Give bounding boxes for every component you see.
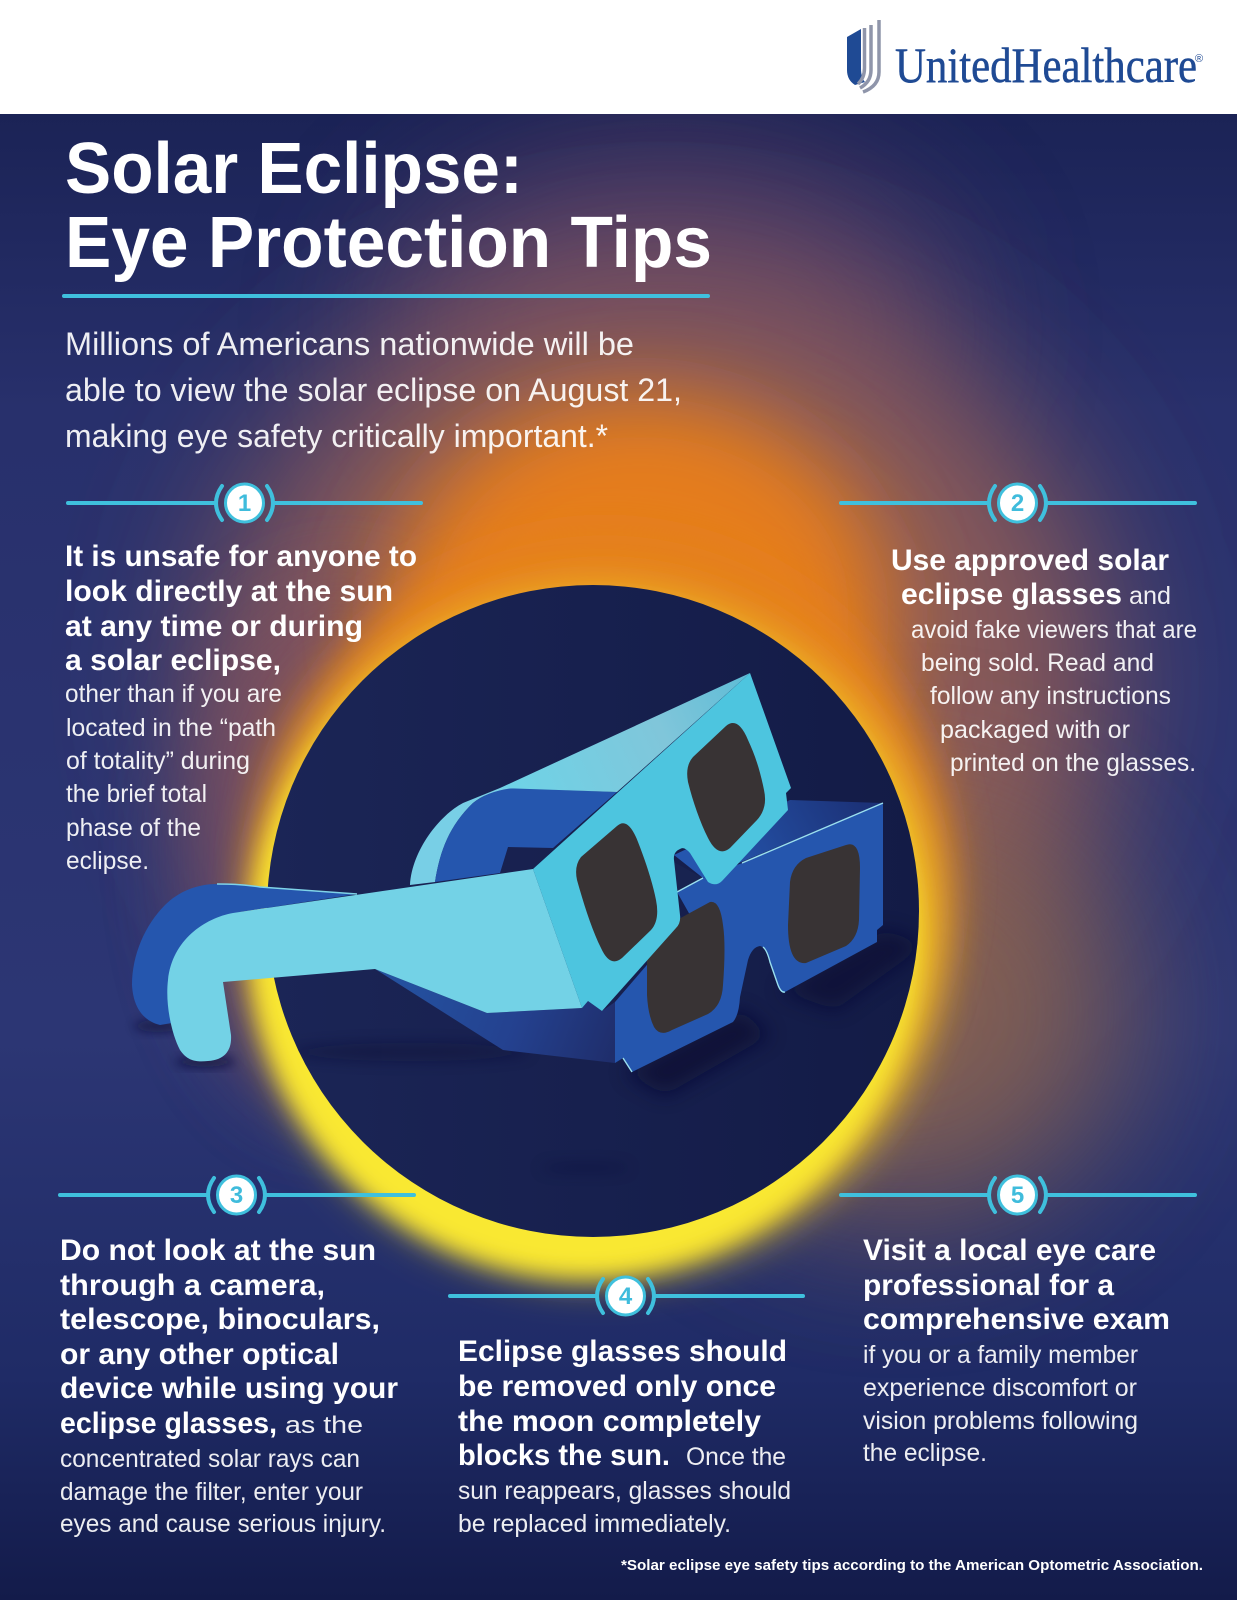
step 2 body text: and	[1129, 582, 1171, 610]
title: Eye Protection Tips	[65, 203, 712, 283]
step 5 bold text	[863, 1234, 1170, 1336]
illustration: eclipse glasses	[132, 673, 925, 1172]
step 3 bold text: telescope, binoculars,	[60, 1303, 380, 1336]
step 1 bold text: at any time or during	[65, 610, 363, 643]
step 2 bold text: Use approved solar	[891, 544, 1169, 577]
step 4 bold text: blocks the sun.	[458, 1439, 670, 1472]
white header band	[0, 0, 1237, 114]
intro text: Millions of Americans nationwide will be	[65, 326, 634, 362]
intro text: making eye safety critically important.*	[65, 418, 608, 454]
step 4 bold text: the moon completely	[458, 1405, 761, 1438]
step 4 marker: 4	[619, 1283, 633, 1310]
step 5 marker	[841, 1176, 1195, 1214]
under side of front temple	[375, 969, 615, 1063]
step 3 body text: concentrated solar rays can	[60, 1445, 360, 1473]
step 4 bold text	[458, 1335, 787, 1472]
step 1 body text: eclipse.	[66, 847, 149, 875]
logo: UnitedHealthcare	[847, 20, 1203, 93]
back face	[615, 803, 883, 1072]
step 2 body text: avoid fake viewers that are	[911, 616, 1197, 644]
step 2 marker	[841, 484, 1195, 522]
ground shadows: temple tips	[134, 1020, 235, 1067]
step 3	[60, 1176, 414, 1538]
step 5	[841, 1176, 1195, 1467]
step 2 bold text	[891, 544, 1169, 611]
step 1 body text: the brief total	[66, 780, 207, 808]
step 1 marker: 1	[238, 490, 251, 517]
back inside top	[674, 800, 883, 878]
step 1 marker	[68, 484, 421, 522]
step 3 bold text: Do not look at the sun	[60, 1234, 376, 1267]
step 4 bold text: Eclipse glasses should	[458, 1335, 787, 1368]
icon: shield	[847, 20, 879, 92]
front lens right	[687, 723, 765, 851]
step 1 body text: of totality” during	[66, 747, 250, 775]
step 2 body text: printed on the glasses.	[950, 749, 1196, 777]
front temple arm	[167, 869, 582, 1061]
back lens right	[788, 844, 860, 963]
logo: UnitedHealthcare: ®	[1195, 53, 1203, 65]
intro text	[65, 326, 682, 454]
back glasses	[132, 800, 883, 1072]
step 4 body text: sun reappears, glasses should	[458, 1477, 791, 1505]
nose gap	[674, 862, 703, 892]
step 1 bold text: look directly at the sun	[65, 575, 393, 608]
step 5 body text	[863, 1341, 1138, 1467]
step 1 body text: located in the “path	[66, 714, 276, 742]
step 4	[450, 1277, 803, 1538]
step 2 marker: 2	[1011, 490, 1024, 517]
step 4 body text: Once the	[686, 1443, 786, 1471]
step 5 marker: 5	[1011, 1182, 1024, 1209]
step 5 body text: if you or a family member	[863, 1341, 1138, 1369]
step 4 body text	[458, 1443, 791, 1538]
front face	[533, 673, 791, 1011]
step 2 body text	[911, 582, 1197, 777]
step 2 bold text: eclipse glasses	[901, 578, 1122, 611]
ground shadows: on disc	[290, 930, 925, 1172]
step 4 body text: be replaced immediately.	[458, 1510, 731, 1538]
step 5 body text: the eclipse.	[863, 1439, 987, 1467]
step 2 body text: packaged with or	[940, 716, 1130, 744]
step 1	[65, 484, 421, 875]
step 3 bold text: device while using your	[60, 1372, 398, 1405]
title	[65, 129, 712, 283]
step 1 body text: phase of the	[66, 814, 201, 842]
intro text: able to view the solar eclipse on August 21,	[65, 372, 682, 408]
step 3 bold text: through a camera,	[60, 1269, 325, 1302]
step 1 bold text	[65, 540, 417, 677]
step 3 marker	[60, 1176, 414, 1214]
step 5 bold text: professional for a	[863, 1269, 1114, 1302]
footnote: *Solar eclipse eye safety tips according to the American Optometric Association.	[621, 1558, 1203, 1574]
step 1 bold text: It is unsafe for anyone to	[65, 540, 417, 573]
right temple rim	[410, 788, 520, 885]
step 1 body text	[65, 680, 282, 875]
step 5 body text: experience discomfort or	[863, 1374, 1137, 1402]
step 4 marker	[450, 1277, 803, 1315]
step 3 body text: as the	[285, 1412, 363, 1439]
top face	[500, 673, 750, 792]
step 4 bold text: be removed only once	[458, 1370, 776, 1403]
step 3 body text: eyes and cause serious injury.	[60, 1510, 386, 1538]
step 3 marker: 3	[230, 1182, 243, 1209]
step 3 body text: damage the filter, enter your	[60, 1478, 363, 1506]
title rule	[62, 294, 710, 298]
step 3 bold text	[60, 1234, 398, 1440]
step 3 bold text: eclipse glasses,	[60, 1407, 277, 1440]
step 2 body text: follow any instructions	[930, 682, 1171, 710]
step 5 body text: vision problems following	[863, 1407, 1138, 1435]
step 2	[841, 484, 1197, 777]
step 2 body text: being sold. Read and	[921, 649, 1154, 677]
step 5 bold text: comprehensive exam	[863, 1303, 1170, 1336]
title: Solar Eclipse:	[65, 129, 523, 209]
step 3 bold text: or any other optical	[60, 1338, 339, 1371]
step 3 body text	[60, 1412, 386, 1538]
back temple arm	[132, 884, 357, 1025]
back lens left	[640, 902, 724, 1033]
step 5 bold text: Visit a local eye care	[863, 1234, 1156, 1267]
step 1 bold text: a solar eclipse,	[65, 644, 281, 677]
right temple inner	[435, 788, 617, 882]
front lens left	[576, 823, 657, 961]
step 1 body text: other than if you are	[65, 680, 282, 708]
eclipse moon disc	[267, 585, 919, 1237]
